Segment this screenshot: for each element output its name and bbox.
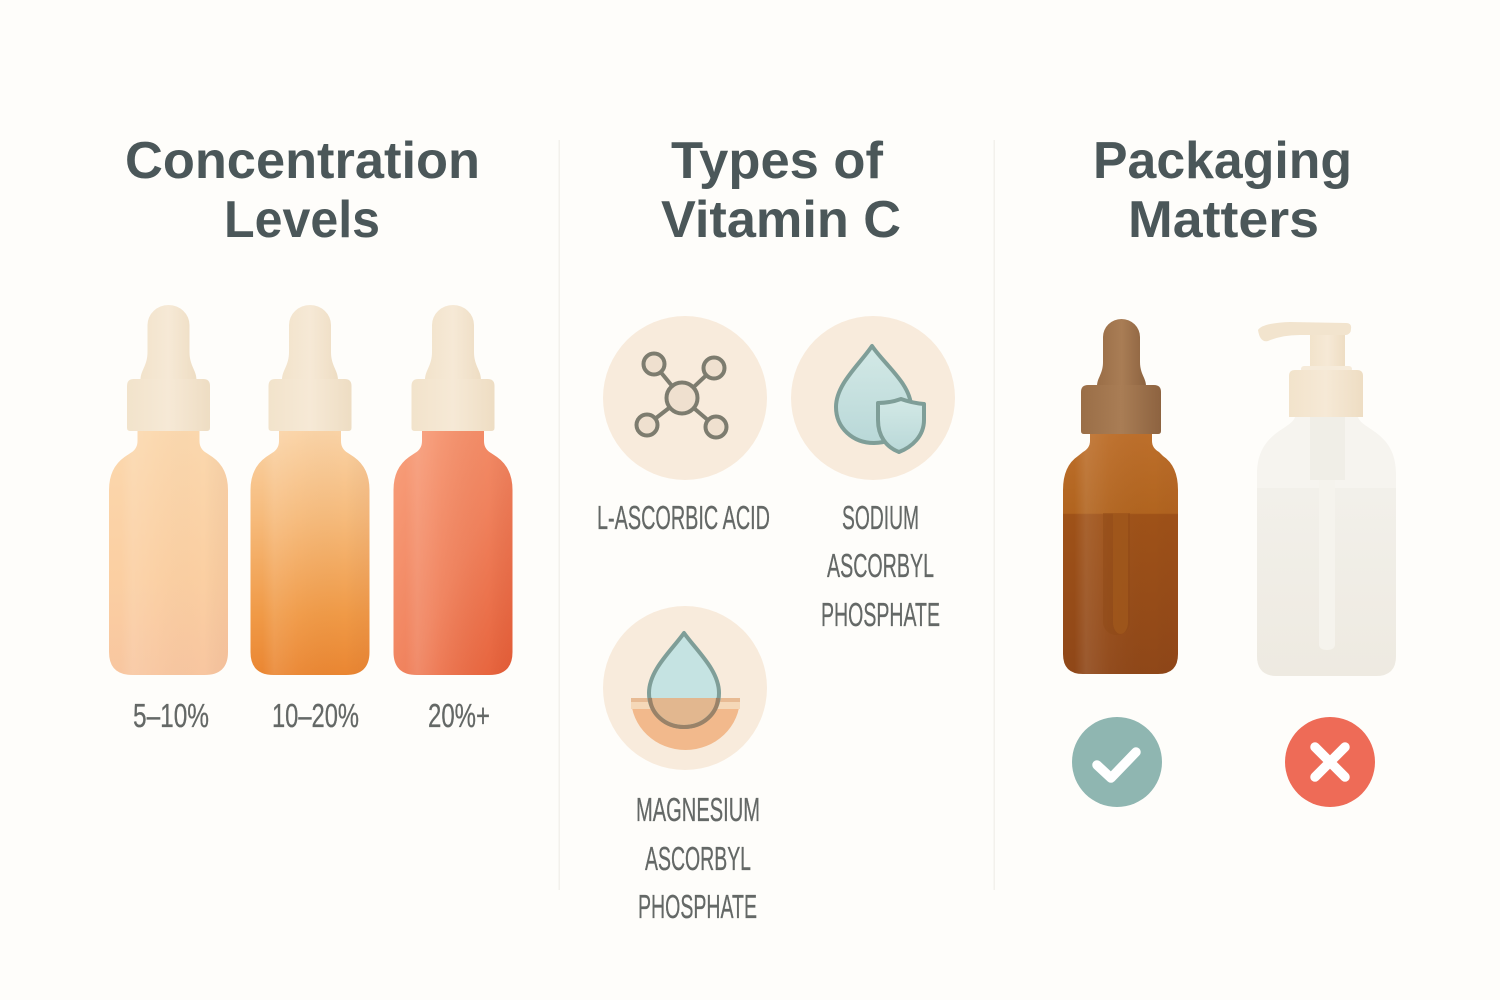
icon: droplet with shield — [791, 316, 955, 480]
label: magnesium ascorbyl phosphate — [636, 791, 760, 925]
heading: packaging matters: Matters — [1128, 191, 1319, 249]
label: 10-20%: 10–20% — [272, 697, 359, 734]
bottle: clear plastic pump — [1257, 322, 1396, 676]
icon: droplet on skin layer — [603, 606, 767, 770]
heading: concentration levels: Levels — [224, 191, 380, 249]
heading: packaging matters: Packaging — [1093, 132, 1352, 190]
label: magnesium ascorbyl phosphate: ASCORBYL — [645, 840, 751, 877]
label: 5-10%: 5–10% — [133, 697, 209, 734]
icon: cross mark — [1285, 717, 1375, 807]
label: sodium ascorbyl phosphate: PHOSPHATE — [821, 596, 940, 633]
heading: concentration levels — [125, 132, 480, 249]
panel: types of vitamin C — [597, 132, 955, 925]
icon: check mark — [1072, 717, 1162, 807]
bottle: amber glass dropper — [1063, 319, 1178, 674]
label: sodium ascorbyl phosphate: ASCORBYL — [827, 547, 934, 584]
label: sodium ascorbyl phosphate: SODIUM — [842, 499, 919, 536]
bottle: 20%+ serum — [394, 305, 512, 675]
label: 20%+: 20%+ — [428, 697, 490, 734]
label: magnesium ascorbyl phosphate: MAGNESIUM — [636, 791, 760, 828]
icon: molecule — [603, 316, 767, 480]
heading: types of vitamin C: Types of — [671, 132, 884, 190]
bottle: 10-20% serum — [250, 305, 370, 675]
panel: packaging matters — [1063, 132, 1396, 807]
bottle: 5-10% serum — [109, 305, 228, 675]
heading: types of vitamin C — [661, 132, 901, 249]
heading: concentration levels: Concentration — [125, 132, 480, 190]
label: magnesium ascorbyl phosphate: PHOSPHATE — [638, 888, 757, 925]
label: l-ascorbic acid: L-ASCORBIC ACID — [597, 499, 770, 536]
panel: concentration levels — [109, 132, 512, 734]
heading: packaging matters — [1093, 132, 1352, 249]
heading: types of vitamin C: Vitamin C — [661, 191, 901, 249]
label: sodium ascorbyl phosphate — [821, 499, 940, 633]
